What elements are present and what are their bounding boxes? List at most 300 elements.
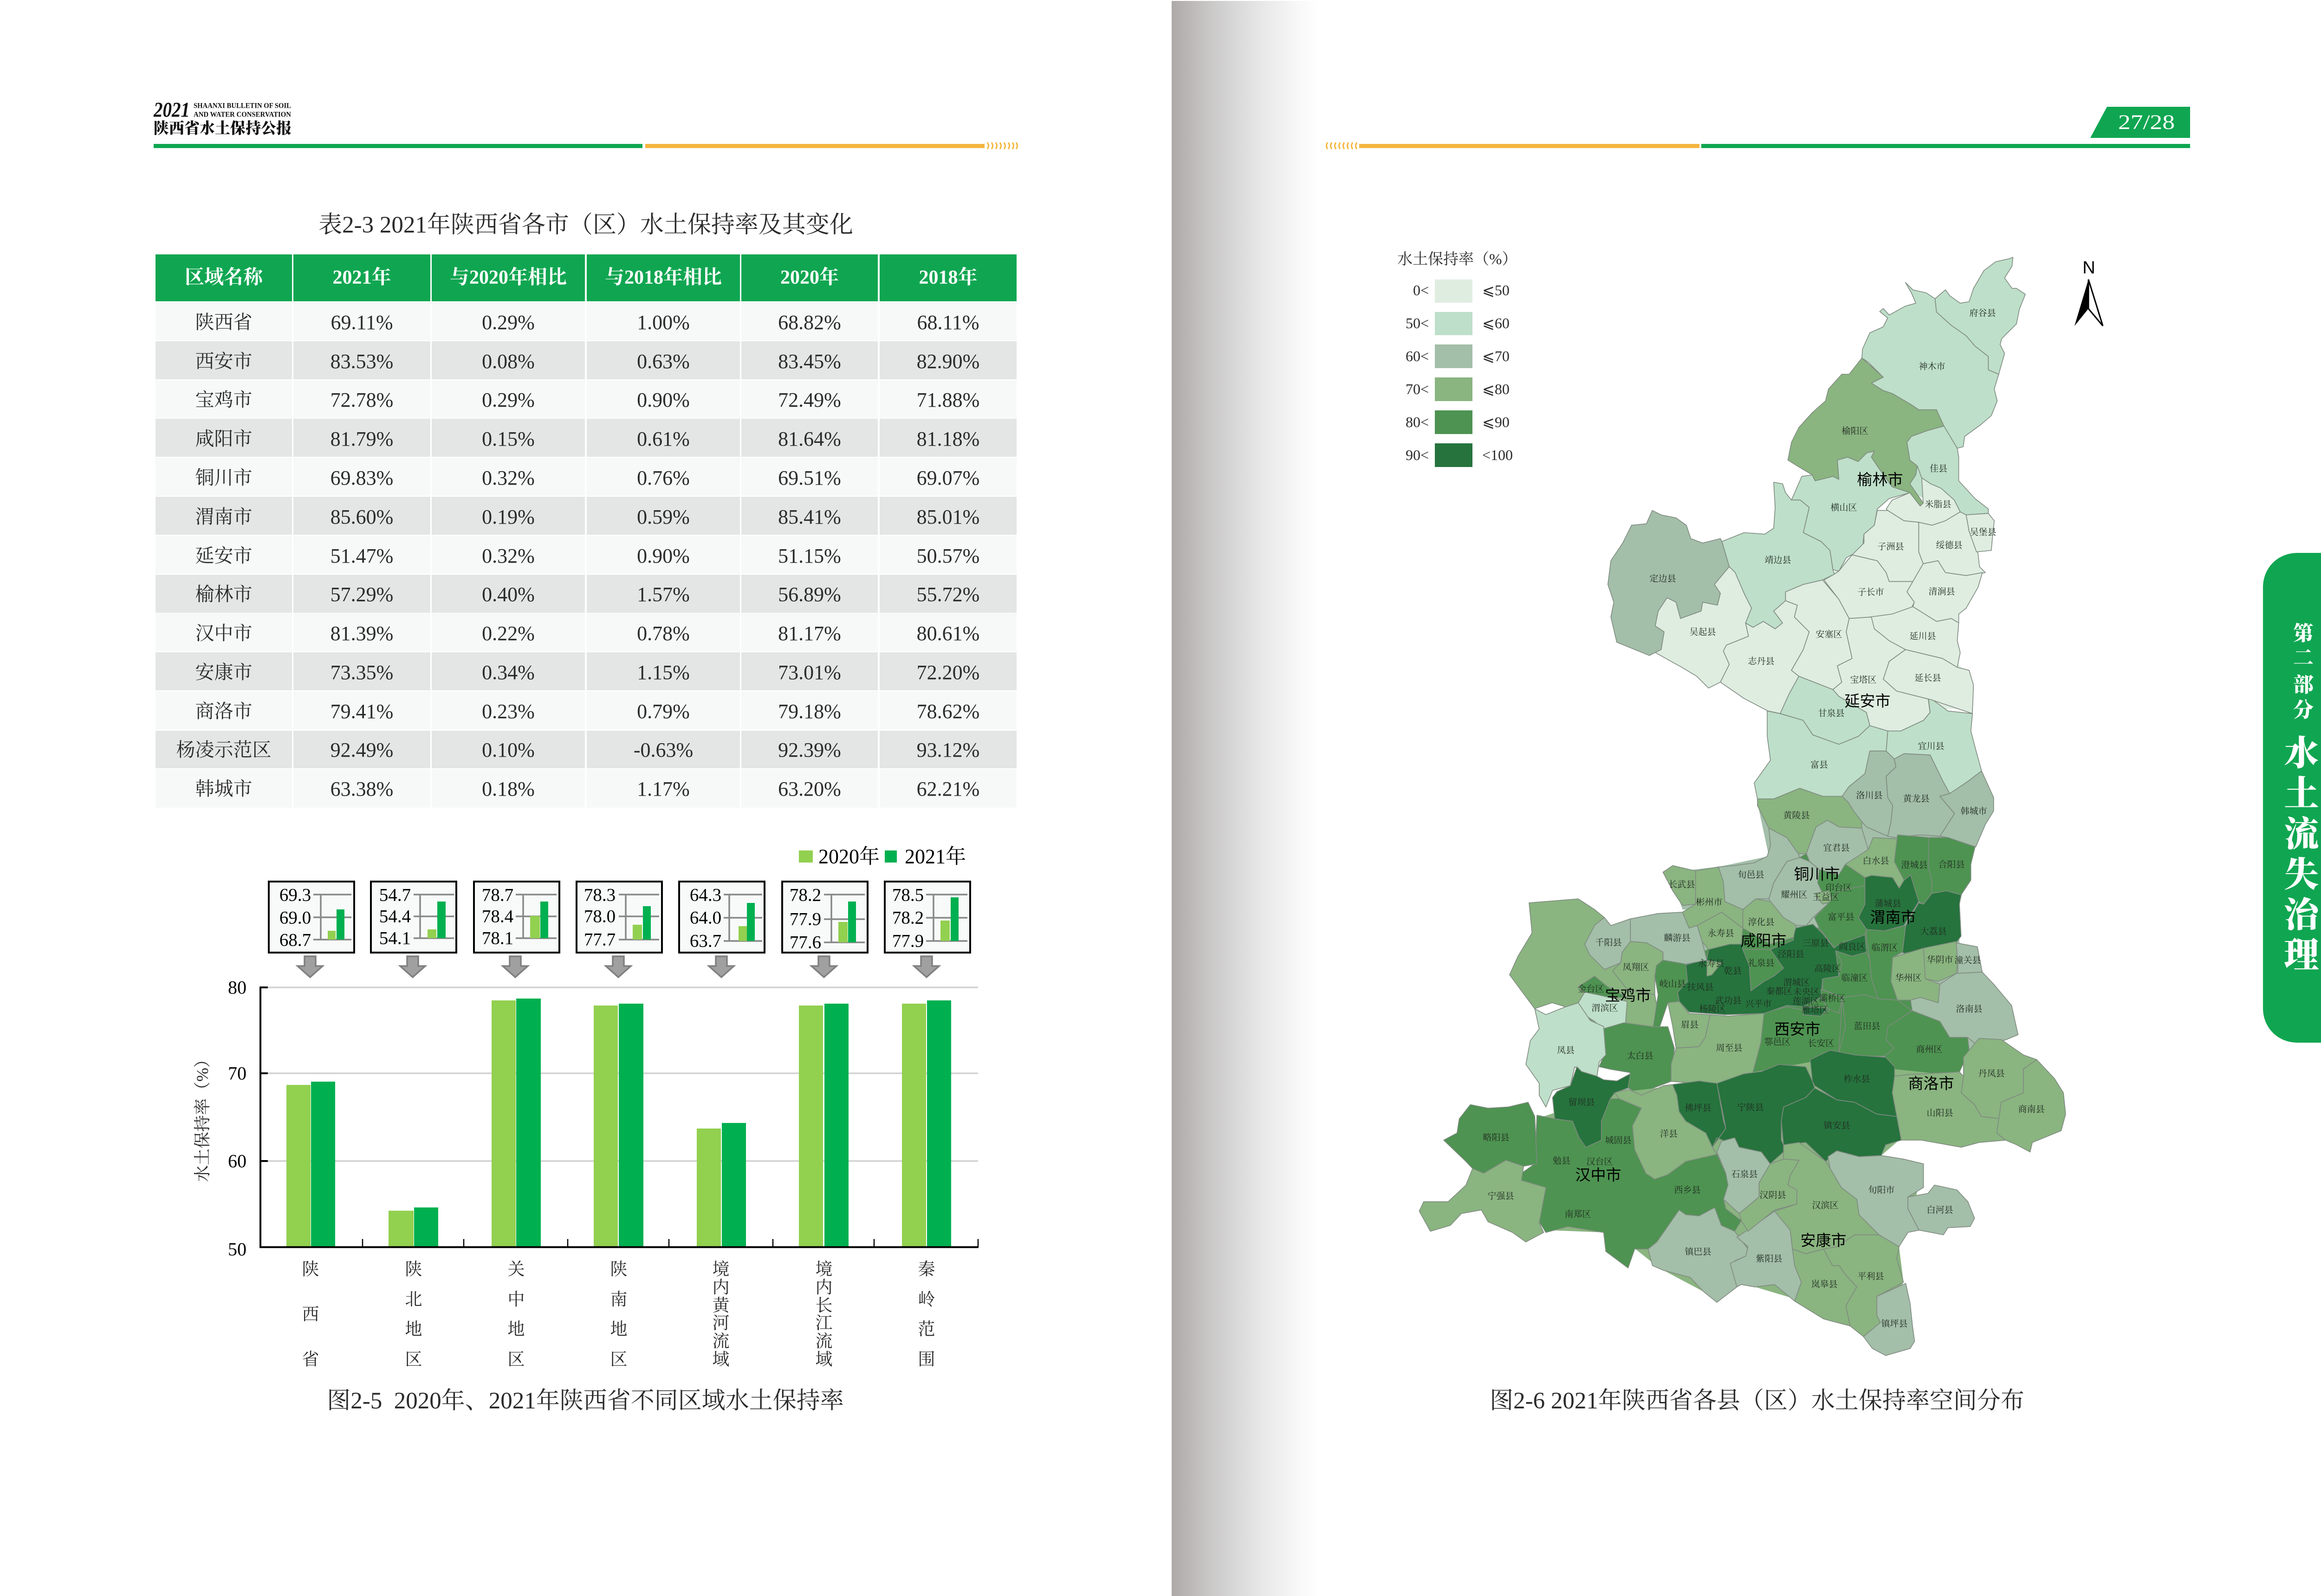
county labels: 长安区 [1808,1038,1835,1048]
county labels: 神木市 [1919,361,1945,371]
table body rows: 0.79% [637,700,690,722]
inset: 境内长江流域: 77.9 [790,909,821,929]
table body rows: 81.39% [331,622,393,644]
inset: 境内黄河流域 [679,882,765,953]
map legend: ⩽50 [1482,282,1510,298]
county labels: 商州区 [1916,1045,1943,1055]
inset charts row [269,882,970,953]
county labels: 西乡县 [1674,1185,1701,1195]
table body rows: 92.39% [778,738,841,761]
county labels: 永寿县 [1707,928,1734,939]
table body rows: 汉中市 [195,623,253,644]
left header rule [154,143,1018,149]
side tab: chapter title: 第 [2293,616,2314,646]
x axis labels: 江 [815,1314,833,1333]
county labels: 甘泉县 [1818,708,1845,719]
county labels: 米脂县 [1925,500,1951,510]
central counties (Guanzhong) [1510,699,2018,1095]
county labels: 石泉县 [1731,1169,1758,1179]
map legend: <100 [1482,447,1513,463]
side tab: chapter title: 理 [2284,928,2319,978]
county labels: 洋县 [1660,1129,1678,1139]
inset: 陕南地区: 77.7 [584,929,616,950]
table body rows: 0.32% [482,544,535,567]
table body rows: 57.29% [331,583,393,605]
y axis numbers [228,977,246,1260]
table body rows: 0.34% [482,661,535,683]
table title: 表2-3 2021年陕西省各市（区）水土保持率及其变化 [318,212,853,238]
county labels: 旬阳市 [1868,1185,1895,1195]
southern counties (Hanzhong, Ankang, Shangluo) [1419,1003,2066,1356]
page number tab [2090,107,2190,138]
x axis labels: 陕 [610,1260,628,1279]
page number tab: 27/28 [2118,110,2175,134]
x axis labels: 黄 [712,1296,731,1316]
x axis labels: 地 [508,1319,525,1339]
county labels: 定边县 [1649,574,1676,584]
side tab: chapter title: 部 [2293,668,2314,698]
inset: 境内长江流域: 78.2 [790,885,821,905]
table body rows: 81.64% [778,427,841,450]
caption figure 2-6: 图2-6 2021年陕西省各县（区）水土保持率空间分布 [1490,1388,2024,1414]
county labels: 周至县 [1716,1043,1743,1053]
x axis labels: 流 [712,1331,730,1351]
y axis title: 水土保持率（%） [193,1051,212,1182]
county labels: 紫阳县 [1756,1253,1783,1264]
city labels: 渭南市 [1870,909,1916,926]
table body rows: 0.32% [482,466,535,489]
map of Shaanxi counties [1419,257,2066,1356]
x axis labels: 区 [508,1350,525,1369]
county labels: 澄城县 [1901,860,1928,870]
table body rows: 0.63% [637,350,690,372]
left page header logo: AND WATER CONSERVATION [194,110,291,119]
county labels: 汉台区 [1586,1157,1613,1167]
table body rows: 安康市 [195,662,253,683]
county labels: 白水县 [1862,856,1889,866]
table body rows: 73.35% [331,661,393,683]
x axis labels: 内 [712,1278,730,1297]
left page header logo: 2021 [153,97,190,122]
table body rows: 85.60% [331,505,393,528]
table body rows: 93.12% [917,738,979,761]
table body rows: 榆林市 [195,584,253,605]
side tab: chapter title [2263,553,2321,1043]
county labels: 耀州区 [1781,889,1808,900]
inset: 陕西省: 69.0 [279,908,311,928]
county labels: 富县 [1810,759,1828,770]
table body rows: 0.61% [637,427,690,450]
bars 2021 [311,999,951,1247]
right header rule [1327,143,2190,149]
table body rows: 延安市 [195,545,253,566]
county labels: 汉阴县 [1759,1190,1786,1200]
table body rows: 咸阳市 [195,428,253,449]
table body rows: 69.07% [917,466,979,489]
table body rows: 0.76% [637,466,690,489]
county labels: 安塞区 [1815,629,1842,640]
county labels: 华阴市 [1926,954,1953,965]
x axis labels: 区 [405,1350,422,1369]
map legend: 90< [1406,447,1429,463]
side tab: chapter title: 二 [2293,641,2314,671]
inset: 秦岭范围 [885,882,970,953]
book spine shadow [1172,1,1318,1596]
inset: 境内黄河流域: 64.0 [690,908,721,928]
county labels: 延川县 [1909,631,1936,642]
table body rows: 72.49% [778,388,841,411]
county labels: 合阳县 [1938,860,1965,870]
inset: 陕西省: 69.3 [279,885,311,905]
table body rows: 69.11% [331,311,393,333]
table body rows: 0.10% [482,738,535,761]
y axis numbers: 70 [228,1063,246,1083]
county labels: 黄龙县 [1903,794,1930,804]
x axis labels: 岭 [918,1291,935,1309]
table body rows: 56.89% [778,583,841,605]
bar chart [193,977,979,1369]
county labels: 礼泉县 [1748,958,1775,968]
county labels: 南郑区 [1564,1209,1591,1219]
inset: 陕北地区: 54.1 [379,928,411,948]
table body rows: 83.45% [778,350,841,372]
county labels: 商南县 [2018,1104,2045,1114]
county labels: 秦都区 [1766,986,1793,996]
x axis labels: 南 [610,1290,628,1309]
county labels: 莲湖区 [1792,996,1819,1006]
county labels: 宁强县 [1487,1191,1514,1201]
x axis labels: 境 [712,1260,730,1279]
table body rows: -0.63% [634,738,693,761]
county labels: 府谷县 [1969,308,1996,318]
table body rows: 0.29% [482,388,535,411]
inset: 关中地区 [474,882,559,953]
table body rows: 0.18% [482,777,535,800]
map legend: 70< [1406,381,1429,397]
y axis numbers: 60 [228,1150,246,1172]
inset: 陕南地区 [577,882,662,953]
caption figure 2-5: 图2-5 2020年、2021年陕西省不同区域水土保持率 [327,1388,844,1414]
county labels: 洛川县 [1856,790,1883,800]
x axis labels: 境 [815,1260,833,1279]
county labels: 兴平市 [1745,999,1772,1009]
table body rows: 51.15% [778,544,841,567]
table body rows: 78.62% [917,700,979,722]
inset: 秦岭范围: 77.9 [892,931,924,951]
y axis numbers: 50 [228,1239,246,1260]
side tab: chapter title: 治 [2284,888,2321,937]
inset: 关中地区: 78.7 [482,885,513,905]
county labels: 千阳县 [1595,938,1622,948]
x axis labels: 长 [815,1296,833,1316]
table body rows: 68.82% [778,311,841,333]
county labels: 宜君县 [1823,843,1850,853]
table body rows: 82.90% [917,350,979,372]
county labels: 宝塔区 [1850,675,1877,685]
left page header logo [153,97,292,138]
county labels: 王益区 [1812,892,1839,902]
county labels [1483,308,2045,1329]
city labels: 铜川市 [1794,865,1840,883]
table body rows: 69.83% [331,466,393,489]
chart legend: 2020 / 2021 [799,845,966,868]
arrows from insets to bars [298,956,939,977]
table body rows: 0.29% [482,311,535,333]
table body rows: 81.79% [331,427,393,450]
county labels: 渭城区 [1783,978,1810,988]
map legend: ⩽90 [1482,414,1510,430]
county labels: 太白县 [1627,1051,1653,1061]
county labels: 永寿县 [1698,958,1725,968]
table body rows: 80.61% [917,622,979,644]
map legend: 0< [1413,282,1429,298]
county labels: 眉县 [1681,1019,1699,1030]
inset: 境内长江流域 [782,882,868,953]
inset: 关中地区: 78.1 [482,928,513,948]
table body rows: 71.88% [917,388,979,411]
table body rows: 宝鸡市 [195,389,253,410]
county labels: 凤县 [1557,1045,1575,1056]
county labels: 子洲县 [1877,541,1904,551]
city labels: 安康市 [1800,1232,1847,1249]
x axis labels: 中 [508,1290,525,1309]
table body rows: 73.01% [778,661,841,683]
county labels: 留坝县 [1568,1097,1595,1108]
x axis labels: 范 [918,1320,935,1339]
inset: 境内长江流域: 77.6 [790,932,821,953]
side tab: chapter title: 分 [2293,693,2314,723]
chart legend: 2020 / 2021: 2021年 [905,845,966,868]
county labels: 白河县 [1926,1205,1953,1215]
table body rows: 68.11% [917,311,979,333]
bars 2020 [286,1000,926,1247]
inset: 陕西省: 68.7 [279,930,311,950]
table body rows: 0.40% [482,583,535,605]
inset: 陕北地区: 54.4 [379,906,411,927]
axes and ticks [259,986,268,1248]
county labels: 富平县 [1828,912,1854,922]
inset: 陕西省 [269,882,354,953]
north arrow [2075,258,2103,326]
city labels: 延安市 [1845,693,1890,709]
county labels: 未央区 [1793,987,1820,997]
map legend: ⩽80 [1482,381,1510,397]
x axis labels: 流 [815,1331,833,1351]
county labels: 绥德县 [1936,540,1963,551]
x axis labels: 省 [302,1350,319,1369]
x axis labels: 河 [712,1314,730,1333]
x axis labels: 地 [405,1319,422,1339]
table body rows: 81.17% [778,622,841,644]
county labels: 宜川县 [1918,741,1945,751]
inset: 陕北地区 [371,882,456,953]
northern counties (Yulin, Yan'an) [1608,257,2025,744]
x axis labels: 北 [405,1291,422,1309]
x axis labels: 关 [508,1260,525,1279]
inset: 陕南地区: 78.3 [584,885,616,905]
side tab: chapter title: 土 [2284,766,2319,816]
table 2-3 [156,254,1017,808]
table body rows: 63.38% [331,777,393,800]
table body rows: 0.22% [482,622,535,644]
county labels: 勉县 [1553,1156,1570,1166]
table body rows: 西安市 [195,350,253,372]
city labels: 宝鸡市 [1605,987,1651,1004]
table body rows: 79.18% [778,700,841,722]
county labels: 岐山县 [1659,979,1686,989]
county labels: 镇坪县 [1881,1318,1908,1329]
table body rows: 0.59% [637,505,690,528]
inset: 秦岭范围: 78.2 [892,908,924,928]
county labels: 凤翔区 [1622,962,1649,972]
county labels: 金台区 [1577,984,1604,994]
county labels: 彬州市 [1696,897,1723,907]
city labels: 咸阳市 [1741,932,1786,949]
table body rows: 铜川市 [195,467,253,488]
county labels: 蓝田县 [1854,1021,1880,1032]
x axis labels: 陕 [405,1260,422,1279]
county labels: 高陵区 [1814,964,1841,974]
map legend: ⩽60 [1482,315,1510,331]
x axis labels: 陕 [302,1260,319,1279]
x axis labels: 区 [610,1350,628,1369]
county labels: 雁塔区 [1802,1005,1828,1015]
map legend: 60< [1406,348,1429,364]
table header row: 2021年 [332,266,391,288]
inset: 关中地区: 78.4 [482,906,513,927]
county labels: 华州区 [1895,973,1922,983]
county labels: 麟游县 [1664,933,1691,943]
map legend: 水土保持率（%） [1397,251,1517,268]
x axis labels: 围 [918,1350,935,1369]
inset: 陕南地区: 78.0 [584,906,616,927]
inset: 陕北地区: 54.7 [379,885,411,905]
table header row: 2018年 [919,266,978,288]
county labels: 灞桥区 [1819,993,1846,1004]
side tab: chapter title: 水 [2284,726,2319,775]
county labels: 鄠邑区 [1764,1037,1791,1047]
table header row: 与2020年相比 [450,266,567,288]
x axis labels: 地 [610,1319,628,1339]
county labels: 吴起县 [1689,627,1716,637]
county labels: 渭滨区 [1591,1003,1618,1013]
county labels: 靖边县 [1764,555,1791,565]
table body rows: 1.17% [637,777,690,800]
table body rows: 51.47% [331,544,393,567]
county labels: 三原县 [1802,938,1829,948]
table body rows: 62.21% [917,777,979,800]
county labels: 岚皋县 [1811,1279,1838,1290]
map legend: ⩽70 [1482,348,1510,364]
county labels: 丹凤县 [1978,1069,2005,1079]
city labels: 西安市 [1774,1020,1821,1038]
county labels: 清涧县 [1928,587,1955,597]
county labels: 佛坪县 [1685,1103,1712,1113]
table body rows: 69.51% [778,466,841,489]
county labels: 黄陵县 [1783,811,1810,821]
table body rows [176,311,979,800]
county labels: 韩城市 [1960,806,1987,816]
table body rows: 85.41% [778,505,841,528]
county labels: 子长市 [1857,587,1884,597]
table header row: 区域名称 [185,266,264,288]
x axis labels: 内 [815,1278,833,1297]
table body rows: 0.23% [482,700,535,722]
north arrow: N [2082,258,2095,278]
y axis numbers: 80 [228,977,246,998]
county labels: 柞水县 [1843,1074,1870,1084]
county labels: 扶风县 [1687,982,1714,993]
table header row: 2020年 [780,266,839,288]
county labels: 镇安县 [1823,1121,1850,1131]
table body rows: 0.78% [637,622,690,644]
county labels: 横山区 [1830,502,1857,513]
table body rows: 1.57% [637,583,690,605]
table body rows: 72.78% [331,388,393,411]
table body rows: 0.15% [482,427,535,450]
table body rows: 杨凌示范区 [176,739,271,760]
county labels: 镇巴县 [1685,1247,1712,1257]
county labels: 阎良区 [1839,941,1866,952]
table body rows: 55.72% [917,583,979,605]
inset: 境内黄河流域: 64.3 [690,885,721,905]
county labels: 大荔县 [1920,927,1947,937]
table body rows: 50.57% [917,544,979,567]
table body rows: 72.20% [917,661,979,683]
county labels: 榆阳区 [1841,426,1868,436]
table body rows: 81.18% [917,427,979,450]
city labels: 汉中市 [1575,1166,1621,1184]
county labels: 临潼区 [1841,973,1868,983]
map legend: 50< [1406,315,1429,331]
county labels: 吴堡县 [1970,527,1997,538]
county labels: 佳县 [1930,463,1947,474]
county labels: 泾阳县 [1777,949,1804,959]
county labels: 平利县 [1857,1271,1884,1281]
county labels: 略阳县 [1483,1133,1510,1143]
city labels: 榆林市 [1857,471,1903,488]
county labels: 山阳县 [1926,1108,1953,1118]
city labels: 商洛市 [1908,1075,1954,1092]
county labels: 城固县 [1605,1135,1632,1146]
chart legend: 2020 / 2021: 2020年 [818,845,880,868]
table body rows: 0.90% [637,388,690,411]
table body rows: 79.41% [331,700,393,722]
x axis labels: 秦 [918,1260,935,1279]
table body rows: 商洛市 [195,701,253,722]
county labels: 武功县 [1715,995,1742,1006]
table body rows: 1.15% [637,661,690,683]
map legend [1397,251,1517,467]
left page header logo: 陕西省水土保持公报 [154,116,292,138]
table body rows: 0.19% [482,505,535,528]
county labels: 志丹县 [1748,656,1775,667]
x axis labels [302,1260,935,1369]
side tab: chapter title: 失 [2284,847,2319,897]
county labels: 淳化县 [1748,917,1775,928]
county labels: 印台区 [1825,883,1852,893]
table body rows: 63.20% [778,777,841,800]
county labels: 延长县 [1914,673,1941,683]
side tab: chapter title: 流 [2284,807,2320,856]
county labels: 杨陵区 [1699,1004,1726,1014]
table body rows: 83.53% [331,350,393,372]
table body rows: 92.49% [331,738,393,761]
table body rows: 陕西省 [195,311,253,333]
county labels: 乾县 [1724,966,1742,976]
x axis labels: 西 [302,1305,319,1324]
table body rows: 渭南市 [195,506,253,527]
